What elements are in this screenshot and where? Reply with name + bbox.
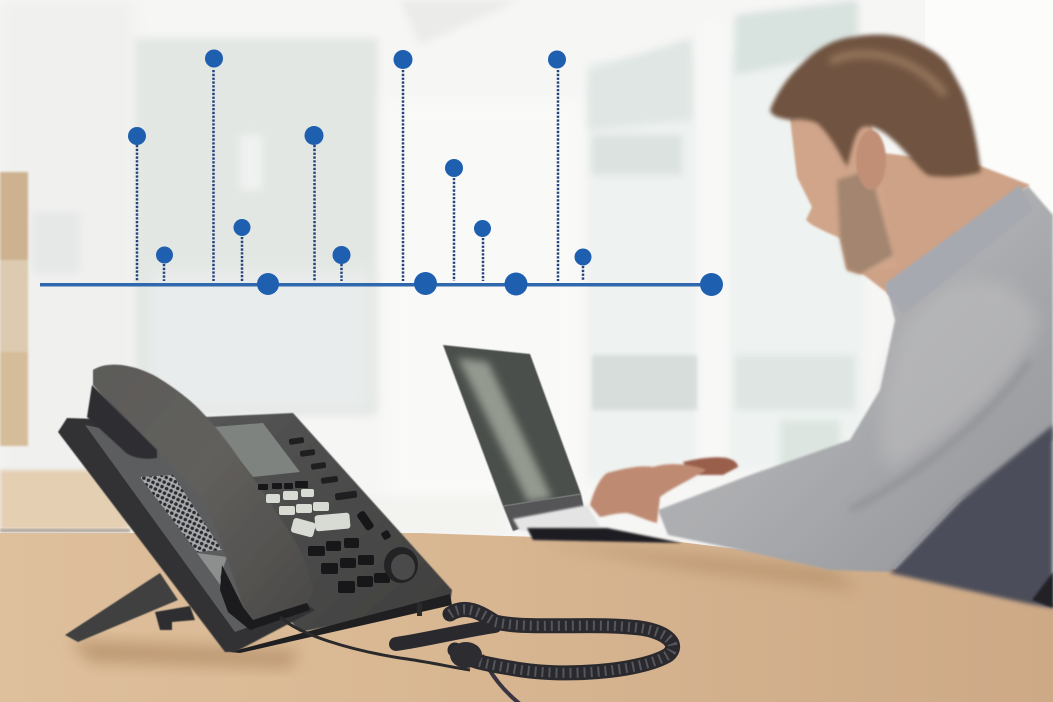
baseline axis	[40, 283, 712, 286]
ear	[856, 130, 886, 190]
collar	[886, 185, 1033, 315]
dial keys	[258, 481, 391, 593]
straight cable	[280, 617, 470, 670]
sleeve crease	[850, 360, 1030, 510]
phone keypad body	[205, 413, 452, 632]
dark trousers and chair	[890, 425, 1053, 608]
handset	[93, 365, 313, 620]
coil loop	[450, 609, 673, 673]
hair highlight	[830, 54, 945, 95]
hinge	[503, 494, 584, 531]
lollipop chart overlay	[40, 50, 723, 296]
keyboard deck	[513, 505, 600, 531]
man: person typing, side view	[658, 35, 1053, 608]
coil junction	[450, 642, 482, 668]
laptop base	[527, 528, 682, 543]
coil lower strand	[396, 626, 495, 644]
dial centre	[391, 554, 415, 580]
stand leg	[65, 573, 178, 642]
display	[213, 423, 300, 477]
shirt highlight	[881, 280, 1040, 470]
hair	[770, 35, 981, 177]
laptop: open laptop, screen and base	[443, 345, 682, 543]
navigation dial	[384, 547, 418, 583]
cord: phone cable and coiled cord	[280, 609, 673, 702]
shirt body	[658, 186, 1053, 572]
hands: hands on keyboard	[590, 457, 738, 523]
coil ridges	[450, 609, 673, 673]
trailing cable	[482, 655, 520, 702]
data point markers	[128, 50, 592, 266]
front lip	[230, 594, 452, 653]
axis nodes	[257, 272, 723, 296]
handset bottom	[220, 565, 310, 630]
beard	[837, 170, 893, 274]
phone: desk phone with handset	[58, 365, 452, 653]
desk: wooden table surfaces	[0, 470, 1053, 702]
cradle base	[58, 418, 315, 652]
dotted stems	[137, 70, 583, 281]
speaker panel	[197, 553, 227, 590]
soft keys	[289, 437, 357, 500]
earpiece	[87, 385, 157, 459]
neck	[860, 150, 1030, 295]
face	[790, 115, 897, 274]
screen reflection	[458, 358, 552, 502]
white keys	[266, 489, 351, 538]
screen	[443, 345, 581, 506]
shelf: tan boxes at left edge	[0, 172, 28, 446]
speaker mesh	[140, 475, 222, 552]
cradle face	[85, 425, 262, 632]
